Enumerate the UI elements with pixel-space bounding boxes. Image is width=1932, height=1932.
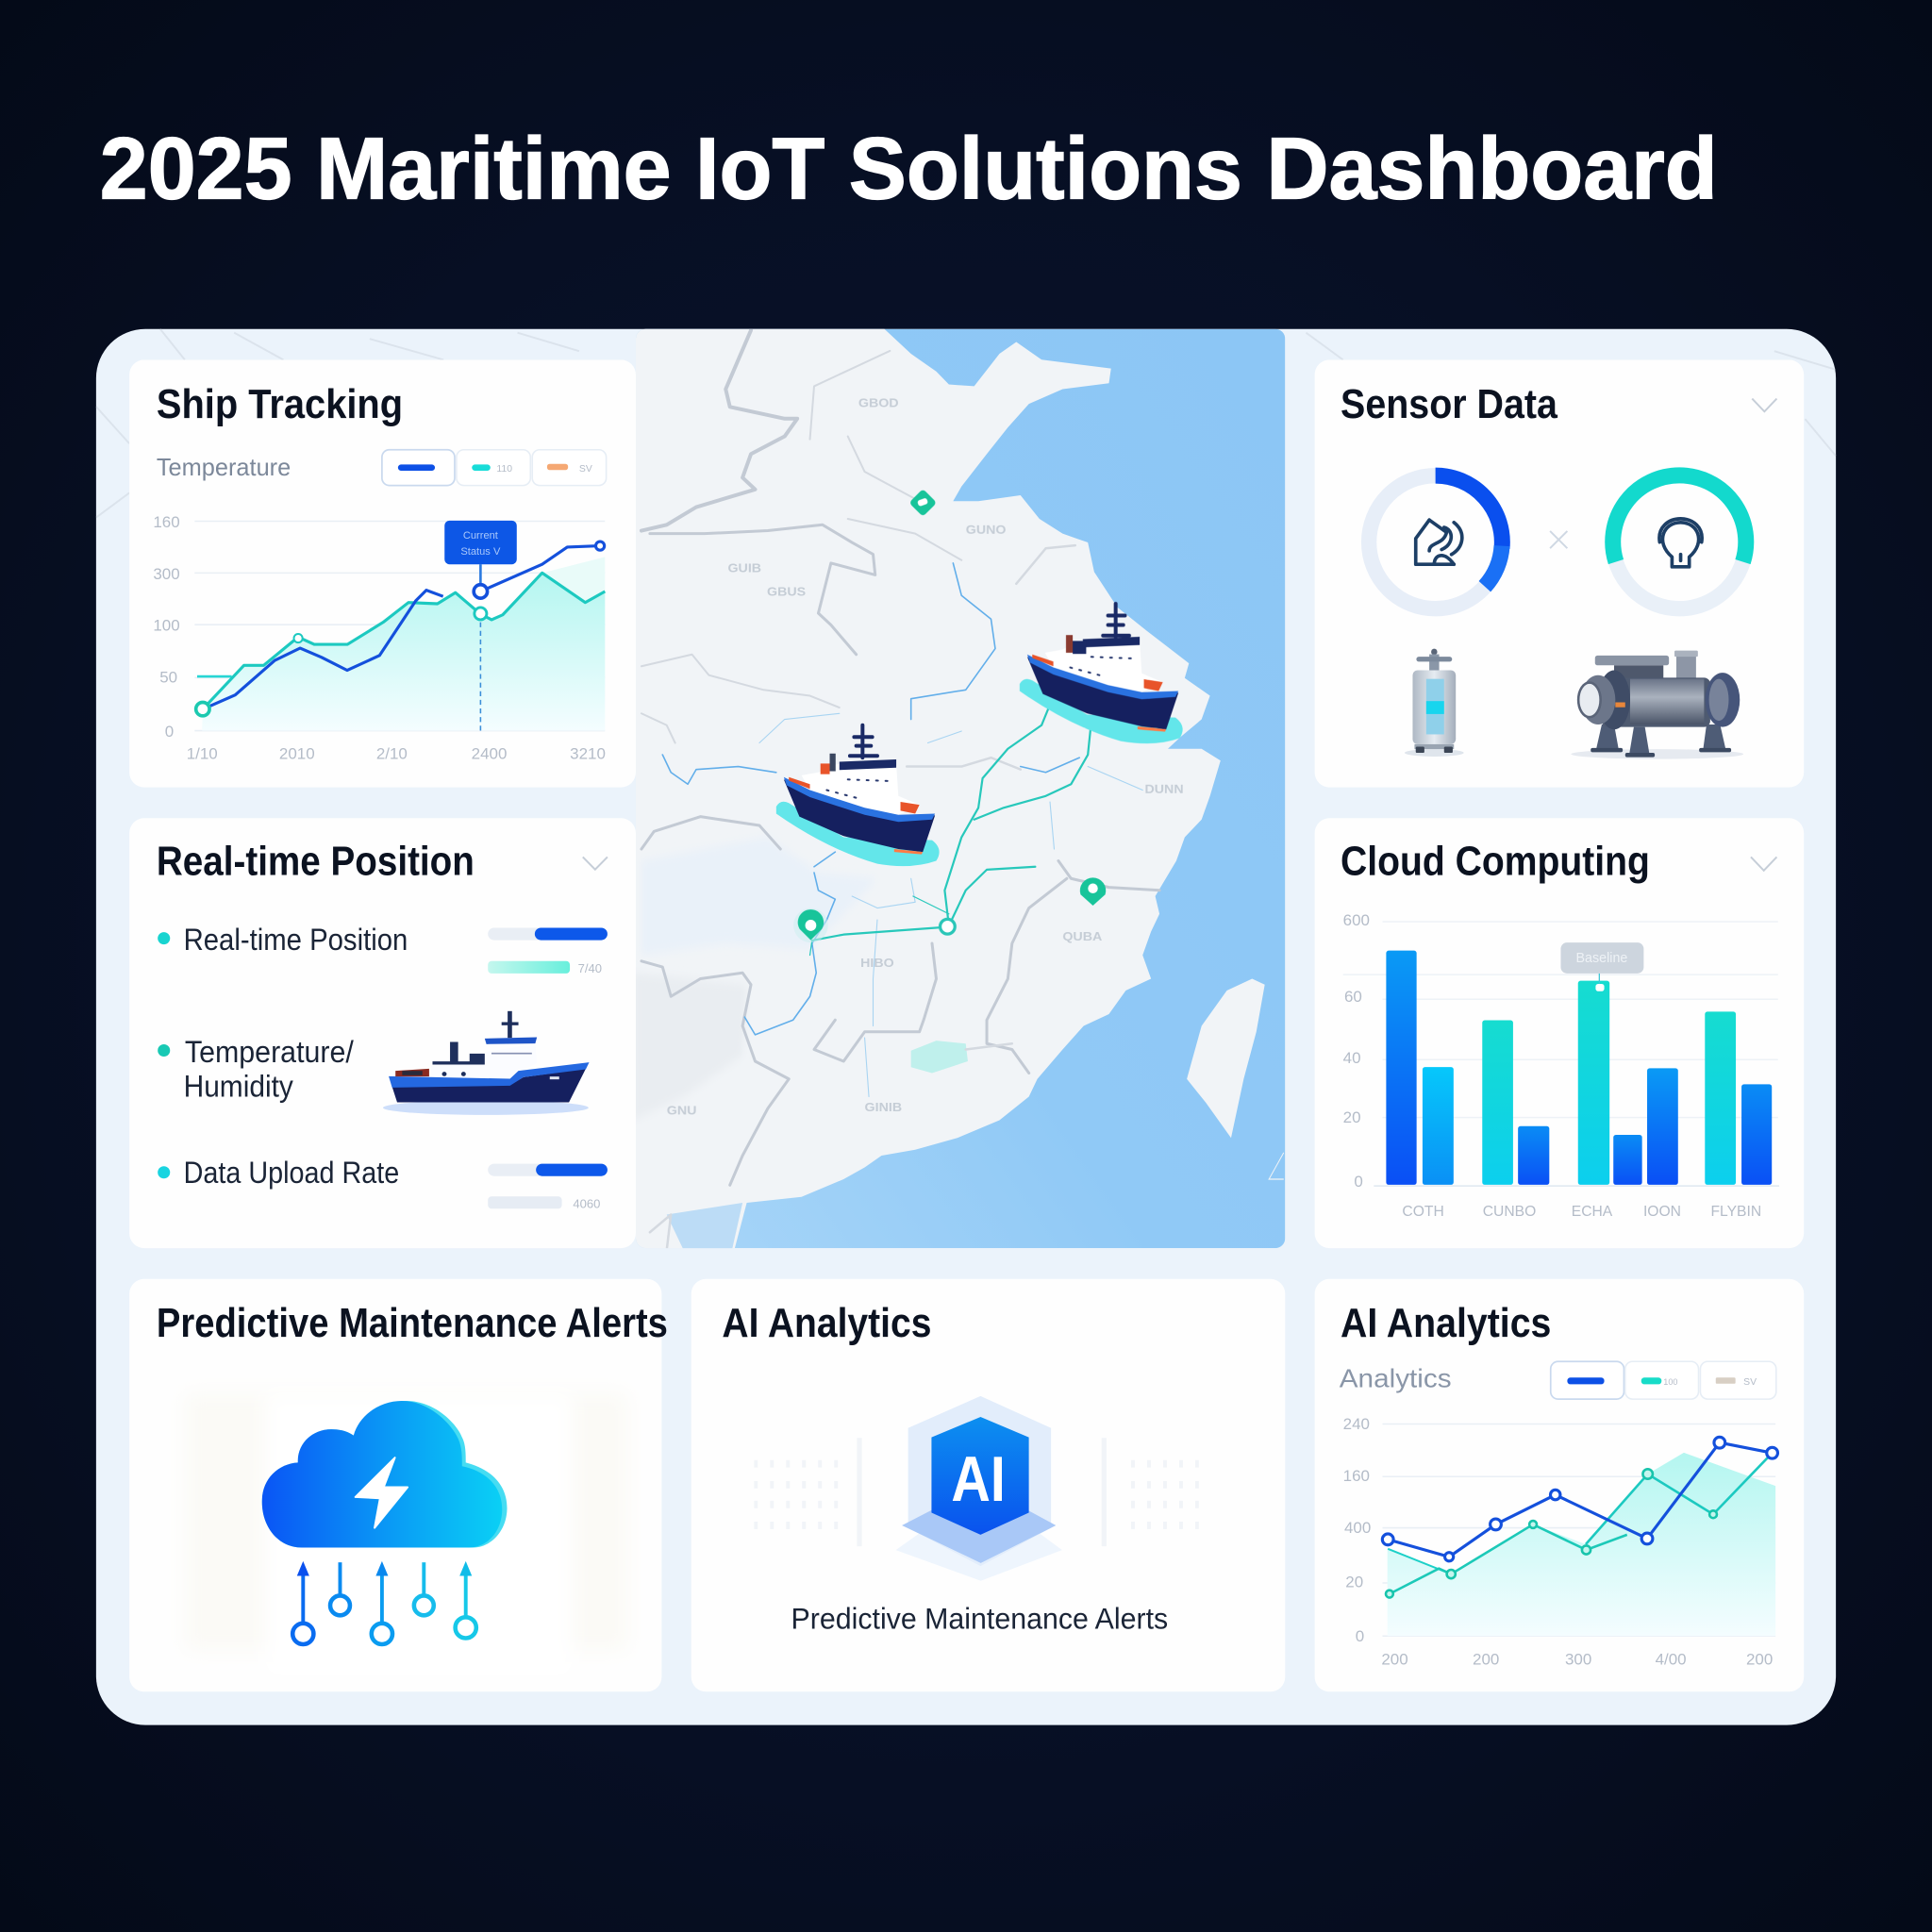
map labels: GBOD [858, 396, 899, 409]
line chart: 20 [1345, 1573, 1363, 1591]
map land [633, 325, 1221, 1258]
panel: sensor data [1315, 359, 1804, 788]
decorative data dots [754, 1438, 1210, 1546]
map pin north [910, 491, 936, 515]
panel: AI analytics centre [691, 1279, 1285, 1691]
line chart: 200 [1381, 1651, 1408, 1669]
heading: Sensor Data [1341, 382, 1558, 427]
icon: engine [1571, 651, 1743, 759]
map labels: GUIB [727, 561, 761, 575]
gauge: blue [1369, 475, 1502, 608]
dashboard panel [96, 325, 1836, 1725]
metric: data upload rate [158, 1155, 608, 1211]
line chart: 400 [1344, 1519, 1371, 1537]
shipping routes [810, 705, 1091, 956]
bar chart: 0 [1354, 1173, 1363, 1191]
province borders [641, 330, 1159, 1250]
legend pills: 100 [1663, 1377, 1677, 1387]
map labels [667, 396, 1184, 1117]
line chart: 2010 [279, 745, 315, 763]
heading: Ship Tracking [157, 382, 403, 427]
metric: real-time position: Real-time Position [184, 922, 408, 957]
map labels: HIBO [860, 957, 894, 970]
legend pills [382, 450, 607, 486]
line chart: 2400 [472, 745, 507, 763]
metric: data upload rate: 4060 [573, 1197, 600, 1211]
line chart: 1/10 [187, 745, 218, 763]
icon: sensor house [1416, 520, 1462, 564]
metric: temperature and humidity: Temperature/ [185, 1034, 355, 1069]
map labels: GBUS [767, 585, 806, 598]
panel: predictive maintenance alerts [129, 1279, 668, 1691]
chevron [1752, 399, 1776, 411]
line chart: 200 [1746, 1651, 1773, 1669]
metric: temperature and humidity: Humidity [184, 1068, 293, 1103]
bar chart: ECHA [1572, 1204, 1613, 1220]
panel: ship tracking [129, 359, 636, 788]
map labels: DUNN [1144, 782, 1184, 796]
map pin south-west [793, 908, 828, 942]
panel: AI analytics chart [1315, 1279, 1804, 1691]
tooltip: Status V [460, 546, 501, 558]
bar chart: IOON [1643, 1204, 1681, 1220]
rivers [662, 563, 1142, 1097]
map labels: GNU [667, 1104, 697, 1117]
bar chart: CUNBO [1483, 1204, 1536, 1220]
line chart: 0 [165, 723, 174, 741]
bar chart: 60 [1344, 988, 1362, 1006]
bar chart: 20 [1343, 1108, 1361, 1126]
map labels: QUBA [1062, 929, 1102, 943]
legend pills: SV [1743, 1377, 1757, 1388]
line chart: 50 [159, 669, 177, 687]
metric: real-time position [158, 922, 608, 975]
chevron [583, 857, 608, 870]
metric: temperature and humidity [158, 1034, 355, 1103]
legend pills: 110 [496, 464, 512, 475]
map pin south-east [1080, 877, 1106, 906]
line chart: 4/00 [1656, 1651, 1687, 1669]
line chart: 240 [1343, 1415, 1370, 1433]
line chart [153, 513, 606, 763]
icon: data connectors [292, 1561, 476, 1644]
line chart: 3210 [570, 745, 606, 763]
heading: Real-time Position [157, 839, 475, 884]
heading: Predictive Maintenance Alerts [157, 1301, 668, 1346]
heading: AI Analytics [722, 1301, 931, 1346]
panel: cloud computing [1315, 818, 1804, 1248]
line chart: 200 [1473, 1651, 1499, 1669]
bar chart: 40 [1343, 1049, 1361, 1067]
map [633, 325, 1285, 1258]
gauge: teal [1613, 475, 1746, 608]
close glyph [1550, 531, 1567, 548]
tooltip [1560, 942, 1643, 991]
caption: Predictive Maintenance Alerts [791, 1603, 1168, 1636]
line chart: 300 [1565, 1651, 1591, 1669]
title: 2025 Maritime IoT Solutions Dashboard [100, 119, 1718, 217]
line chart: 2/10 [376, 745, 408, 763]
line chart: 160 [153, 513, 180, 531]
icon: AI shield [896, 1396, 1062, 1581]
ship 2 on map [1020, 604, 1183, 743]
icon: ship [383, 1011, 590, 1115]
line chart: 100 [153, 617, 180, 635]
heading: Cloud Computing [1341, 839, 1650, 884]
bar chart: COTH [1402, 1204, 1444, 1220]
icon: cloud with lightning [262, 1401, 507, 1547]
map node [941, 919, 955, 934]
line chart: 160 [1343, 1467, 1370, 1485]
line chart: 0 [1356, 1627, 1364, 1645]
tooltip [444, 521, 517, 584]
metric: data upload rate: Data Upload Rate [184, 1155, 399, 1190]
legend pills: SV [579, 464, 592, 475]
bar chart: 600 [1343, 911, 1370, 929]
metric: real-time position: 7/40 [578, 961, 602, 975]
panel: real-time position [129, 818, 636, 1248]
bar chart: FLYBIN [1710, 1204, 1761, 1220]
line chart [1343, 1415, 1777, 1669]
line chart: 300 [153, 565, 180, 583]
tooltip: Current [463, 530, 498, 541]
axis title: Analytics [1340, 1364, 1452, 1393]
bar chart [1343, 911, 1779, 1220]
ship 1 on map [776, 725, 940, 866]
map labels: GUNO [966, 523, 1007, 537]
icon: AI shield: AI [951, 1444, 1006, 1515]
map labels: GINIB [865, 1101, 902, 1114]
axis title: Temperature [157, 453, 291, 481]
icon: bulb [1659, 519, 1702, 567]
heading: AI Analytics [1341, 1301, 1551, 1346]
legend pills [1551, 1361, 1776, 1399]
icon: sensor tank [1405, 649, 1464, 757]
tooltip: Baseline [1576, 951, 1627, 966]
chevron [1751, 857, 1776, 871]
